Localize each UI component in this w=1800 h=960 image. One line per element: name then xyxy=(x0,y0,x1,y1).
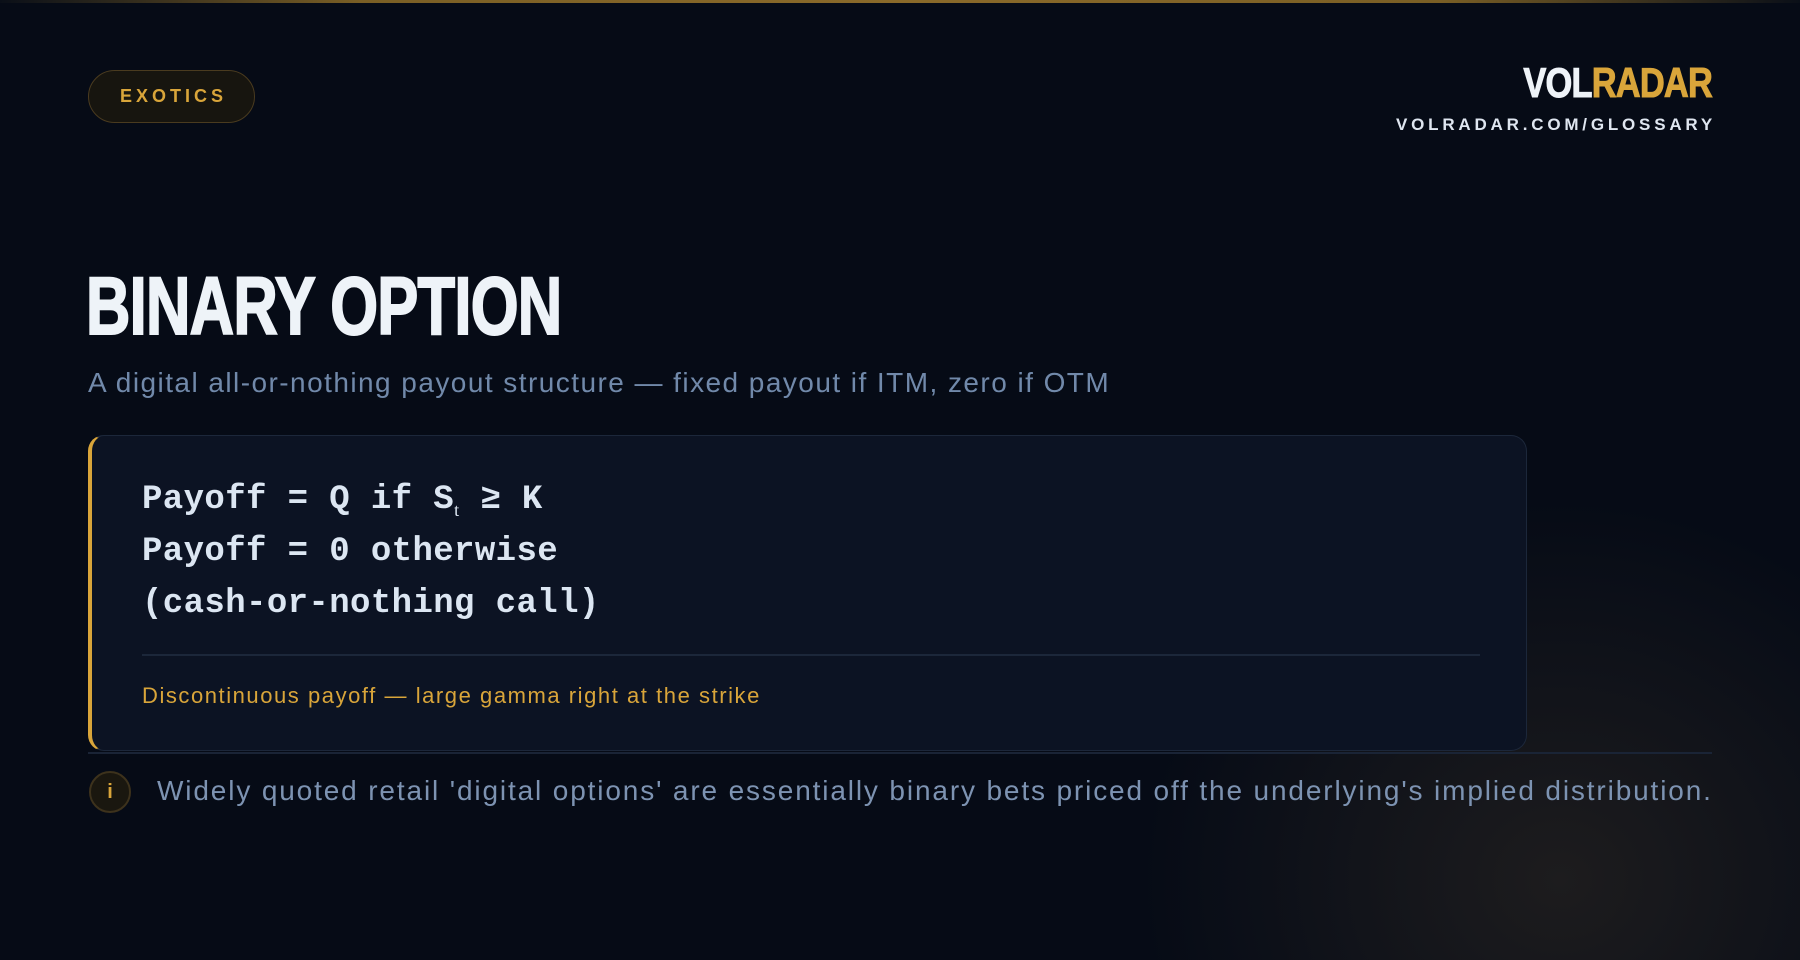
note: Discontinuous payoff — large gamma right at the strike xyxy=(142,683,761,708)
icon: info: i xyxy=(107,781,113,803)
formula text xyxy=(142,481,600,623)
panel: formula card xyxy=(88,435,1527,751)
icon: info xyxy=(89,771,131,813)
formula text: (cash-or-nothing call) xyxy=(142,585,600,623)
url: VOLRADAR.COM/GLOSSARY xyxy=(1396,115,1716,134)
logo: VOLRADAR xyxy=(1523,59,1712,106)
formula text: Payoff = 0 otherwise xyxy=(142,533,558,571)
category pill: EXOTICS xyxy=(120,86,227,106)
formula text: Payoff = Q if St ≥ K xyxy=(142,481,543,520)
subtitle: A digital all-or-nothing payout structure — fixed payout if ITM, zero if OTM xyxy=(88,367,1110,398)
category pill xyxy=(88,70,255,123)
title: BINARY OPTION xyxy=(86,261,561,352)
fact text: Widely quoted retail 'digital options' are essentially binary bets priced off the underlying's implied distribution. xyxy=(157,775,1713,806)
